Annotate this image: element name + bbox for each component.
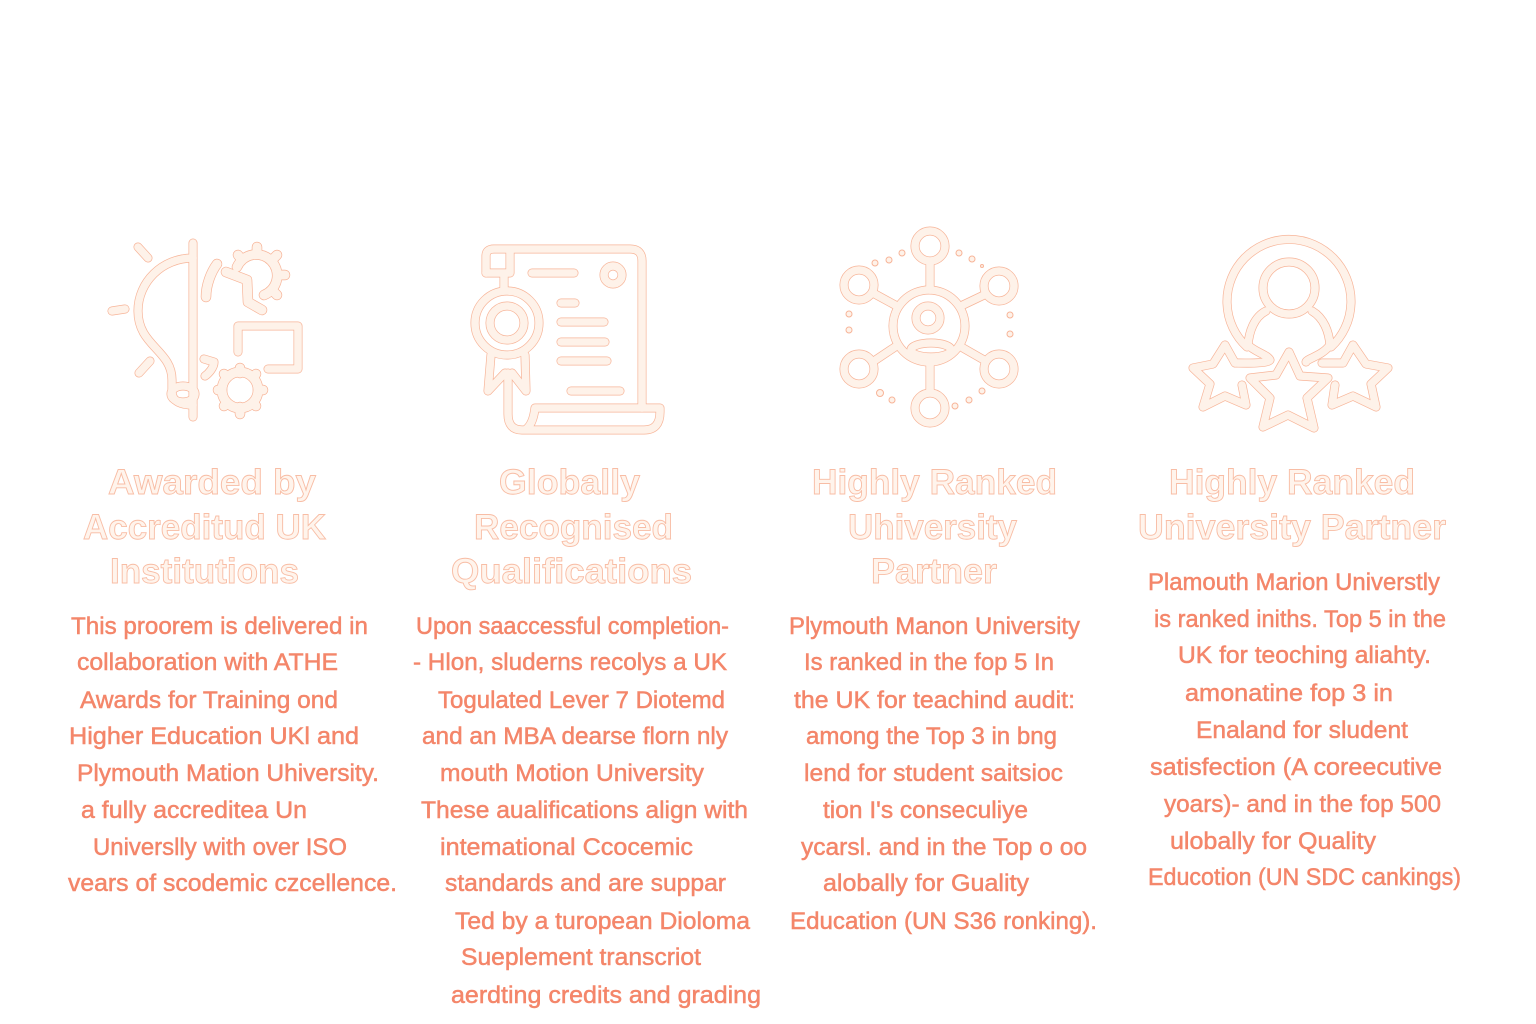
icon: person with three stars bbox=[1193, 239, 1388, 428]
column 2 heading bbox=[451, 463, 692, 591]
column 3 body text: the UK for teachind audit: bbox=[794, 687, 1075, 714]
column 1 heading bbox=[83, 463, 326, 591]
column 2 heading: Globally bbox=[499, 463, 641, 502]
column 1 body text: collaboration with ATHE bbox=[77, 649, 338, 676]
column 2 body text: intemational Ccocemic bbox=[440, 834, 693, 861]
column 2 body text: These aualifications align with bbox=[421, 797, 748, 824]
column 4 heading: Highly Ranked bbox=[1169, 463, 1415, 502]
icon: certificate with seal bbox=[475, 249, 660, 430]
column 3 body text: ycarsl. and in the Top o oo bbox=[801, 834, 1087, 861]
column 4 heading: University Partner bbox=[1138, 508, 1446, 547]
column 2 body text: - Hlon, sluderns recolys a UK bbox=[413, 649, 727, 676]
column 1 body text: Universlly with over ISO bbox=[93, 834, 347, 861]
column 3 heading: Partner bbox=[871, 552, 997, 591]
column 1 heading: Accreditud UK bbox=[83, 508, 326, 547]
column 3 body text: Plymouth Manon University bbox=[789, 613, 1080, 640]
column 4 body text: satisfection (A coreecutive bbox=[1150, 754, 1442, 781]
column 3 body text: tion I's conseculiye bbox=[823, 797, 1028, 824]
column 1 body text: Higher Education UKl and bbox=[69, 723, 359, 750]
column 2 body text: Sueplement transcriot bbox=[461, 944, 701, 971]
column 1 body text: This proorem is delivered in bbox=[71, 613, 368, 640]
column 4 body text: Educotion (UN SDC cankings) bbox=[1148, 864, 1461, 891]
column 3 body text: among the Top 3 in bng bbox=[806, 723, 1057, 750]
column 1 heading: Institutions bbox=[110, 552, 299, 591]
column 3 body text: Education (UN S36 ronking). bbox=[790, 908, 1097, 935]
column 2 body text: aerdting credits and grading bbox=[451, 982, 761, 1009]
column 2 heading: Qualifications bbox=[451, 552, 692, 591]
column 2 body text bbox=[413, 613, 761, 1009]
column 4 body text: is ranked iniths. Top 5 in the bbox=[1154, 606, 1446, 633]
column 2 body text: standards and are suppar bbox=[445, 870, 726, 897]
column 3 heading bbox=[812, 463, 1057, 591]
column 3 body text: lend for student saitsioc bbox=[804, 760, 1063, 787]
column 4 heading bbox=[1138, 463, 1446, 547]
column 1 body text: vears of scodemic czcellence. bbox=[68, 870, 397, 897]
column 3 body text: Is ranked in the fop 5 In bbox=[804, 649, 1054, 676]
column 4 body text: Plamouth Marion Universtly bbox=[1148, 569, 1440, 596]
icon: network of nodes bbox=[844, 231, 1014, 423]
column 2 body text: Upon saaccessful completion- bbox=[416, 613, 729, 640]
column 2 body text: Togulated Lever 7 Diotemd bbox=[438, 687, 725, 714]
column 3 body text: alobally for Guality bbox=[823, 870, 1029, 897]
column 1 body text: Awards for Training ond bbox=[80, 687, 338, 714]
column 4 body text: yoars)- and in the fop 500 bbox=[1164, 791, 1441, 818]
column 1 heading: Awarded by bbox=[108, 463, 317, 502]
column 3 heading: Uhiversity bbox=[848, 508, 1018, 547]
column 2 body text: and an MBA dearse florn nly bbox=[422, 723, 728, 750]
column 3 heading: Highly Ranked bbox=[812, 463, 1057, 502]
column 2 heading: Recognised bbox=[474, 508, 673, 547]
column 2 body text: mouth Motion University bbox=[440, 760, 704, 787]
column 1 body text: a fully accreditea Un bbox=[81, 797, 307, 824]
column 3 body text bbox=[789, 613, 1097, 935]
icon: light bulb and gears bbox=[112, 243, 298, 417]
column 4 body text: ulobally for Quality bbox=[1170, 828, 1376, 855]
column 1 body text: Plymouth Mation Uhiversity. bbox=[77, 760, 379, 787]
column 1 body text bbox=[68, 613, 397, 897]
column 2 body text: Ted by a turopean Dioloma bbox=[455, 908, 751, 935]
column 4 body text: amonatine fop 3 in bbox=[1185, 680, 1393, 707]
column 4 body text: UK for teoching aliahty. bbox=[1178, 642, 1431, 669]
column 4 body text bbox=[1148, 569, 1461, 891]
column 4 body text: Enaland for sludent bbox=[1196, 717, 1408, 744]
